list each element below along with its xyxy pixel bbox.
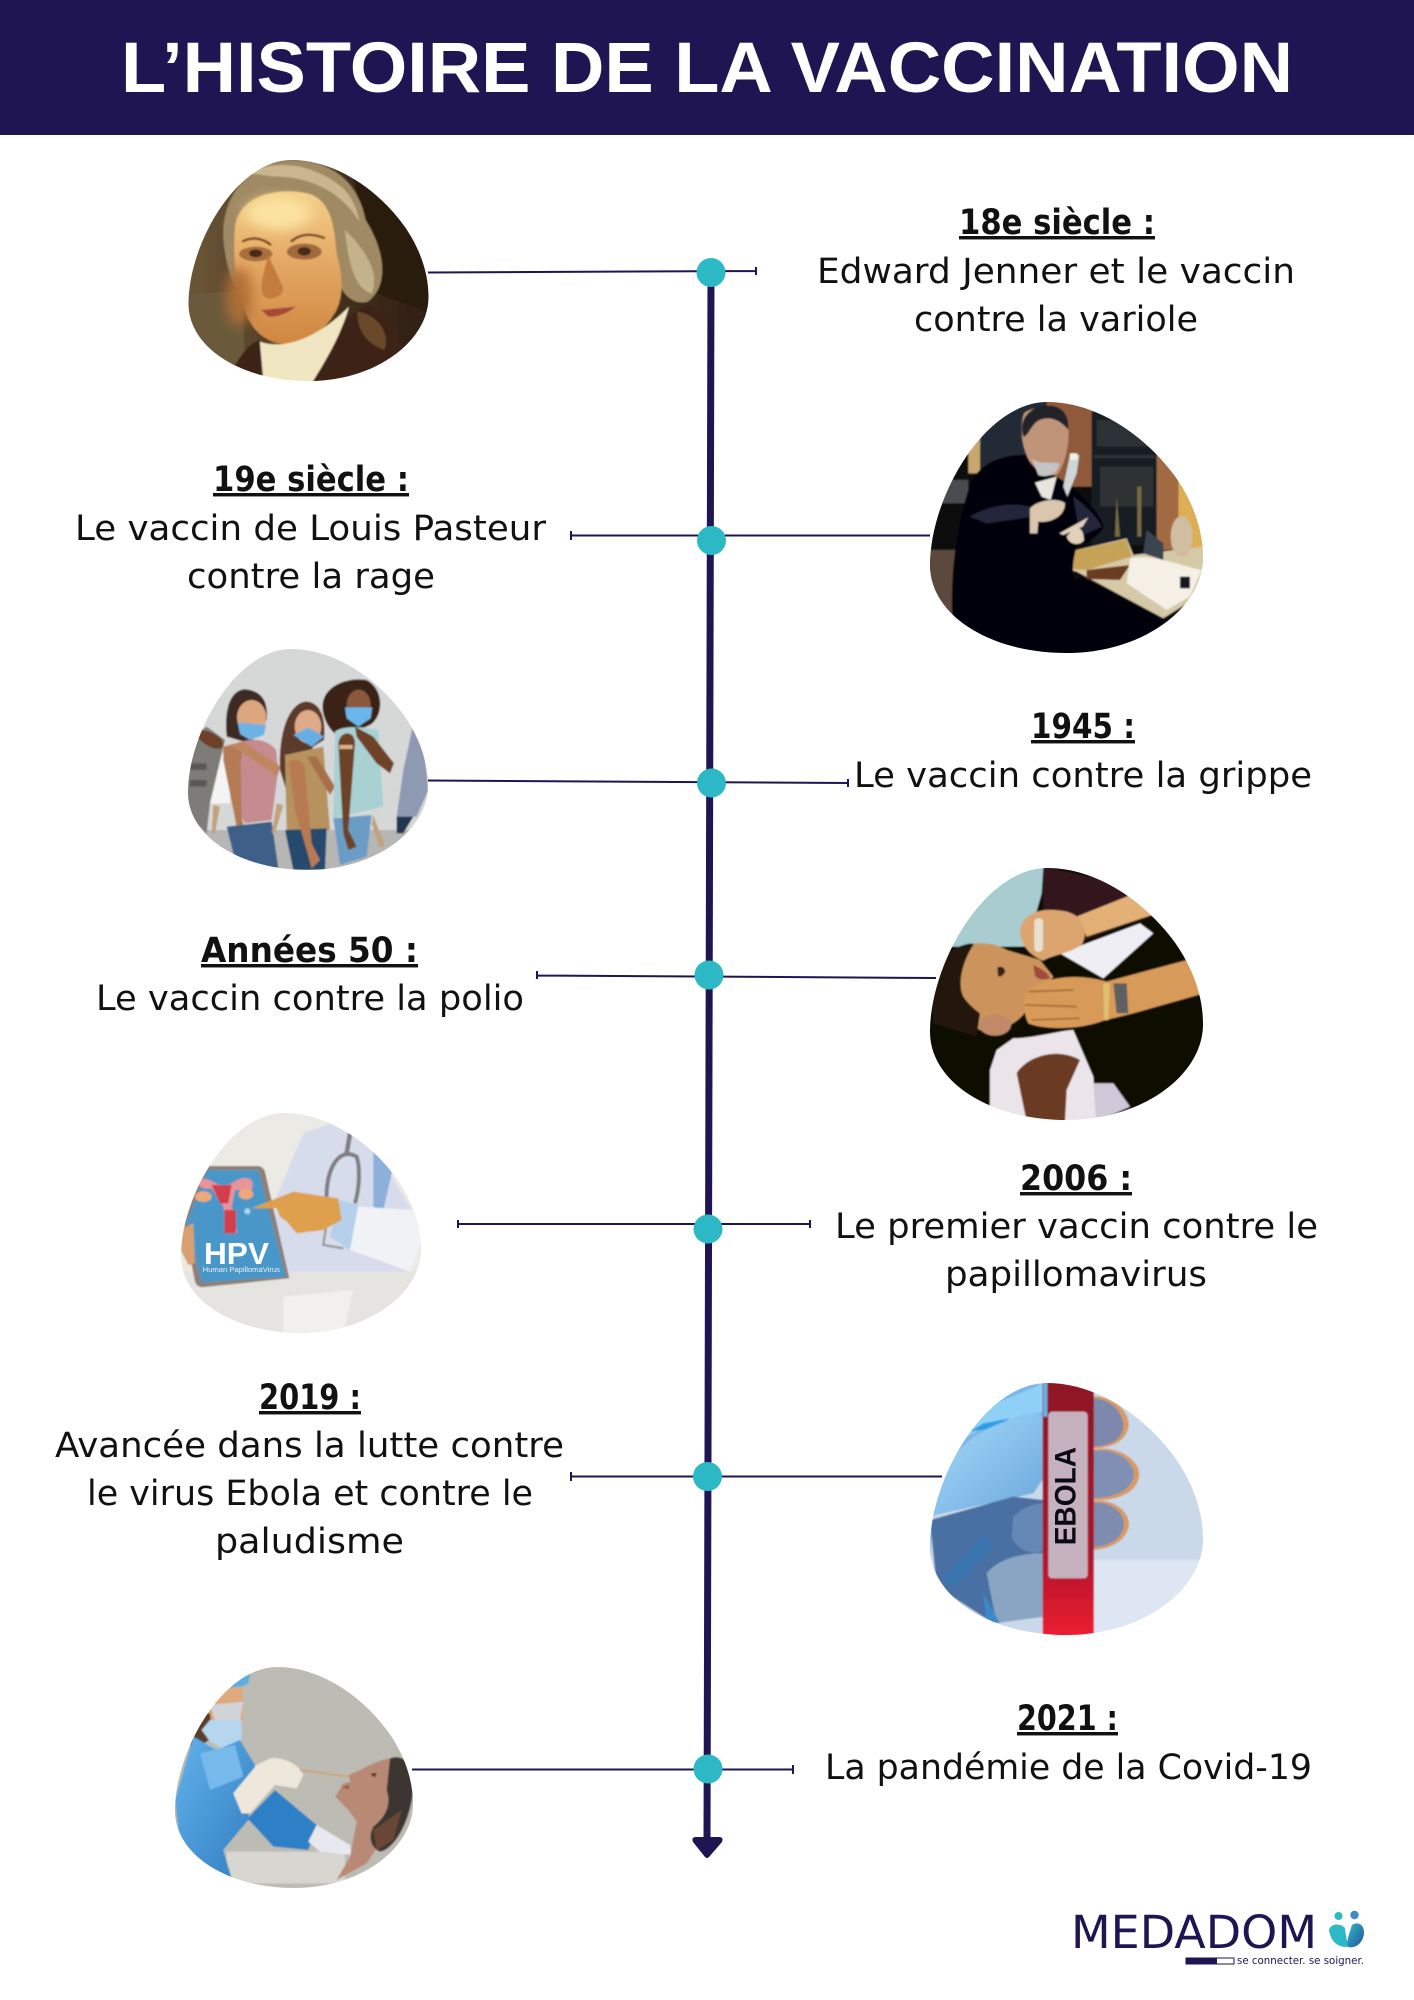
text block: 2006: papillomavirus [945, 1255, 1207, 1295]
text block: 18e siècle: contre la variole [914, 300, 1198, 340]
text block: 19e siècle: 19e siècle : [213, 460, 409, 500]
text block: 2006: Le premier vaccin contre le [835, 1207, 1318, 1247]
photo: Edward Jenner [188, 160, 428, 381]
photo: HPV tablet [181, 1113, 421, 1333]
text block: 1945 [854, 707, 1312, 796]
logo: Medadom: MEDADOM [1071, 1906, 1317, 1959]
photo: HPV tablet: Human PapillomaVirus [203, 1267, 281, 1274]
text block: 18e siècle [817, 203, 1295, 340]
tablet text: HPV [204, 1237, 270, 1271]
text block: 19e siècle [75, 460, 547, 597]
text block: 2021: La pandémie de la Covid-19 [825, 1748, 1312, 1788]
text block: 2021 [825, 1699, 1312, 1788]
text block: 1945: 1945 : [1031, 707, 1135, 747]
text block: 1945: Le vaccin contre la grippe [854, 756, 1312, 796]
logo progress bar [1186, 1958, 1234, 1964]
text block: 2019: le virus Ebola et contre le [87, 1474, 533, 1514]
text block: 18e siècle: 18e siècle : [959, 203, 1155, 243]
header banner [0, 0, 1414, 135]
photo: Louis Pasteur [927, 397, 1207, 660]
text block: 2019 [55, 1378, 564, 1562]
photo: polio vaccine drops [927, 863, 1207, 1127]
text block: 2006: 2006 : [1020, 1159, 1132, 1199]
text block: 19e siècle: Le vaccin de Louis Pasteur [75, 509, 547, 549]
connector lines [412, 267, 942, 1774]
photo: Ebola blood tube [927, 1377, 1207, 1640]
text block: 2019: Avancée dans la lutte contre [55, 1426, 564, 1466]
tube label text: EBOLA [1050, 1447, 1083, 1545]
text block: 18e siècle: Edward Jenner et le vaccin [817, 252, 1295, 292]
title: L’HISTOIRE DE LA VACCINATION [121, 29, 1293, 108]
arrow head [692, 1837, 723, 1858]
timeline dots [693, 258, 726, 1784]
logo tagline: se connecter. se soigner. [1237, 1954, 1364, 1967]
text block: Années 50: Le vaccin contre la polio [96, 979, 524, 1019]
timeline axis with arrow [692, 272, 723, 1858]
photo: Covid-19 swab test [170, 1663, 420, 1893]
text block: 2006 [835, 1159, 1318, 1295]
text block: Années 50 [96, 931, 524, 1019]
logo icon [1329, 1911, 1364, 1947]
text block: 19e siècle: contre la rage [187, 557, 435, 597]
text block: 2019: paludisme [215, 1522, 404, 1562]
text block: Années 50: Années 50 : [201, 931, 418, 971]
text block: 2021: 2021 : [1017, 1699, 1118, 1739]
photo: children with masks [188, 649, 428, 870]
text block: 2019: 2019 : [259, 1378, 361, 1418]
